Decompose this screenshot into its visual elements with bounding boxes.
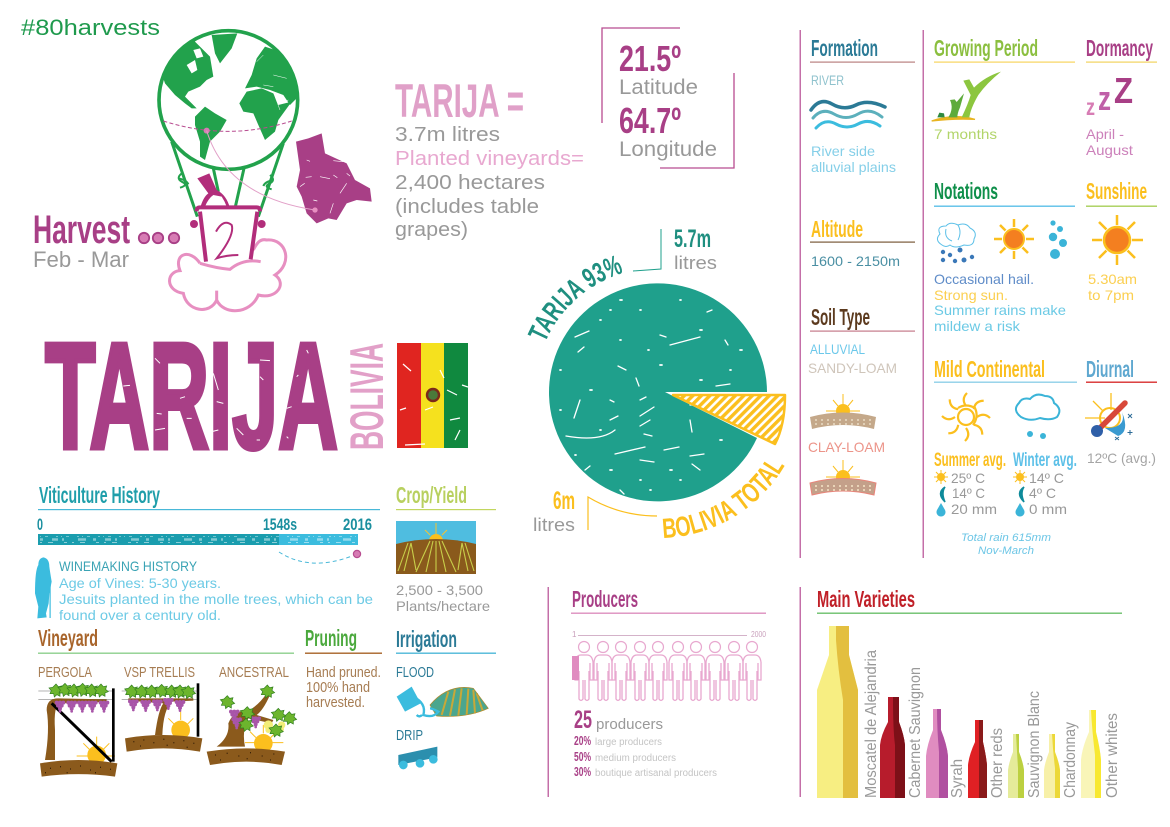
- bottle: Sauvignon Blanc: [1008, 691, 1043, 798]
- bottle: Moscatel de Alejandria: Moscatel de Alejandria: [863, 650, 880, 798]
- panel: soil type: SANDY-LOAM: [808, 360, 897, 376]
- icon: zzz: [1086, 70, 1133, 120]
- panel: crop yield: Crop/Yield: [396, 482, 467, 508]
- panel: notations: Summer rains make: [934, 302, 1066, 318]
- panel: notations: Notations: [934, 178, 998, 204]
- producers count: [574, 706, 663, 734]
- total rain note: Total rain 615mm: [961, 532, 1051, 544]
- panel: pruning: Pruning: [305, 625, 357, 651]
- summer average: Summer avg.: [934, 450, 1006, 471]
- continents: [163, 33, 298, 160]
- coordinates box: Latitude: [619, 76, 698, 99]
- icon: flood irrigation: [397, 687, 488, 716]
- bottle: Chardonnay: Chardonnay: [1062, 722, 1079, 798]
- callout: 5.7m litres: litres: [674, 253, 717, 273]
- panel: diurnal: Diurnal: [1086, 356, 1134, 382]
- icon: hail cloud: [937, 223, 975, 263]
- winter average: [1013, 450, 1077, 517]
- icon: rain drops: [1049, 220, 1067, 259]
- icon: zzz: z: [1086, 94, 1095, 120]
- producers breakdown: 30%: [574, 764, 591, 779]
- bottle: Moscatel de Alejandria: [817, 626, 880, 798]
- label: Bolivia total: [663, 465, 785, 538]
- producers count: 25: [574, 706, 592, 734]
- icon: zzz: Z: [1114, 70, 1133, 111]
- bottle: Other reds: [968, 720, 1006, 798]
- panel: formation: [810, 35, 915, 175]
- panel: notations: Strong sun.: [934, 287, 1008, 303]
- producers breakdown: 50%: [574, 749, 591, 764]
- icon: elderly person: [35, 557, 52, 618]
- title: TARIJA: TARIJA: [45, 311, 338, 480]
- panel: notations: Occasional hail.: [934, 271, 1034, 287]
- production text block: 3.7m litres: [395, 124, 500, 146]
- pie chart: Tarija share of Bolivia: [528, 225, 786, 538]
- coordinates box: 64.7º: [619, 100, 681, 141]
- icon: VSP trellis vine: [122, 683, 202, 752]
- icon: pergola vine: [38, 683, 117, 777]
- producers breakdown: 20%: [574, 733, 591, 748]
- total rain note: [961, 532, 1051, 557]
- panel: soil type: [808, 304, 915, 495]
- panel: main varieties: [817, 586, 1122, 798]
- hashtag: #80harvests: [21, 15, 160, 40]
- production text block: TARIJA =: [395, 74, 524, 127]
- harvest dates: Feb - Mar: [33, 247, 129, 272]
- panel: pruning: [305, 625, 382, 711]
- panel: growing period: 7 months: [934, 126, 997, 142]
- panel: vineyard: VSP TRELLIS: [124, 664, 195, 681]
- icon: globe hot air balloon: [159, 31, 372, 311]
- producers breakdown: large producers: [595, 737, 662, 748]
- winemaking text: WINEMAKING HISTORY: [59, 558, 198, 574]
- panel: diurnal: [1085, 356, 1157, 466]
- winter average: Winter avg.: [1013, 450, 1077, 471]
- panel: vineyard: ANCESTRAL: [219, 664, 289, 681]
- callout: 6m litres: litres: [533, 515, 575, 535]
- panel: notations: mildew a risk: [934, 318, 1021, 334]
- panel: viticulture history: [35, 482, 380, 623]
- panel: producers: 2000: [751, 630, 766, 639]
- winter average: 4º C: [1029, 485, 1056, 501]
- icon: sun: [1092, 215, 1143, 265]
- total rain note: Nov-March: [978, 545, 1034, 557]
- winter average: 14º C: [1029, 470, 1064, 486]
- globe outline: [159, 31, 298, 169]
- bottle in bucket: [197, 173, 230, 208]
- coordinates box: [602, 28, 734, 168]
- panel: pruning: 100% hand: [306, 679, 370, 696]
- production text block: [395, 74, 584, 241]
- heading: Harvest: Harvest: [33, 208, 130, 252]
- callout: 6m litres: 6m: [553, 487, 575, 515]
- panel: crop yield: [396, 482, 496, 614]
- bucket: [200, 212, 257, 262]
- title: TARIJA: [45, 311, 338, 480]
- bottle: Sauvignon Blanc: Sauvignon Blanc: [1026, 691, 1043, 798]
- panel: growing period: [932, 35, 1075, 142]
- panel: viticulture history: 2016: [343, 515, 372, 534]
- production text block: grapes): [395, 219, 468, 241]
- summer average: [934, 450, 1006, 517]
- icon: three dots: [139, 233, 179, 243]
- icon: clay-loam soil: [810, 460, 876, 495]
- bottle: Syrah: Syrah: [949, 759, 966, 798]
- callout: 6m litres: [533, 487, 657, 535]
- panel: formation: RIVER: [811, 72, 844, 88]
- bottle: Other whites: Other whites: [1104, 713, 1121, 798]
- cloud: [170, 240, 286, 311]
- panel: viticulture history: 0: [37, 515, 43, 534]
- winemaking text: Age of Vines: 5-30 years.: [59, 575, 221, 591]
- icon: ancestral vine: [207, 685, 297, 765]
- panel: soil type: ALLUVIAL: [810, 341, 865, 357]
- production text block: Planted vineyards=: [395, 148, 584, 170]
- icon: globe hot air balloon: 2: [200, 256, 201, 257]
- panel: altitude: Altitude: [811, 216, 863, 242]
- pie chart: Tarija share of Bolivia: BOLIVIA TOTAL: [662, 462, 785, 538]
- panel: dormancy: August: [1086, 142, 1133, 158]
- icon: river waves: [811, 102, 885, 128]
- panel: sunshine: [1086, 178, 1157, 303]
- panel: sunshine: 5.30am: [1088, 271, 1137, 287]
- balloon ropes: [172, 142, 283, 217]
- icon: Bolivian flag: [397, 343, 468, 448]
- vine illustrations: [38, 683, 297, 777]
- panel: soil type: Soil Type: [811, 304, 870, 330]
- producers breakdown: medium producers: [595, 753, 676, 764]
- bottle: Cabernet Sauvignon: Cabernet Sauvignon: [907, 667, 924, 798]
- panel: vineyard: PERGOLA: [38, 664, 92, 681]
- subtitle: BOLIVIA: BOLIVIA: [340, 343, 393, 450]
- winter average: 0 mm: [1029, 501, 1067, 517]
- panel: mild continental: [934, 356, 1077, 557]
- bottle: Other reds: Other reds: [989, 728, 1006, 798]
- panel: producers: Producers: [572, 586, 638, 612]
- pie chart: Tarija share of Bolivia: TARIJA 93%: [528, 256, 622, 339]
- panel: irrigation: [396, 626, 496, 769]
- icon: zzz: z: [1098, 80, 1111, 118]
- producers breakdown: boutique artisanal producers: [595, 768, 717, 779]
- icon: sprouting vine: [932, 72, 1001, 121]
- winemaking text: [59, 558, 373, 623]
- icon: strong sun: [994, 219, 1034, 259]
- icon: drip irrigation: [398, 747, 438, 769]
- panel: sunshine: to 7pm: [1088, 287, 1134, 303]
- bottle: Other whites: [1081, 710, 1121, 798]
- map: Bolivia: [296, 133, 372, 223]
- panel: crop yield: 2,500 - 3,500: [396, 582, 483, 598]
- panel: pruning: harvested.: [306, 694, 365, 711]
- panel: viticulture history: 1548s: [263, 515, 297, 534]
- bottle: Syrah: [926, 709, 966, 798]
- panel: diurnal: 12ºC (avg.): [1087, 450, 1156, 466]
- panel: altitude: [810, 216, 915, 269]
- people pictogram: [572, 642, 761, 700]
- panel: mild continental: Mild Continental: [934, 356, 1045, 382]
- callout: 5.7m litres: 5.7m: [674, 225, 711, 253]
- slice: rest of Bolivia: [673, 395, 785, 444]
- panel: growing period: Growing Period: [934, 35, 1038, 61]
- icon: thermometer: [1085, 393, 1132, 440]
- icon: winter cloud: [1016, 395, 1059, 439]
- label: Tarija 93%: [545, 273, 623, 343]
- panel: viticulture history: Viticulture History: [39, 482, 160, 508]
- icon: summer sun: [942, 393, 990, 441]
- panel: formation: alluvial plains: [811, 159, 896, 175]
- panel: irrigation: Irrigation: [396, 626, 457, 652]
- producers count: producers: [596, 716, 663, 733]
- callout: 5.7m litres: [633, 225, 717, 273]
- panel: pruning: Hand pruned.: [306, 664, 381, 681]
- panel: dormancy: April -: [1086, 126, 1124, 142]
- summer average: 20 mm: [951, 501, 997, 517]
- winemaking text: found over a century old.: [59, 607, 221, 623]
- panel: soil type: CLAY-LOAM: [808, 439, 885, 455]
- summer average: 14º C: [952, 485, 985, 501]
- winemaking text: Jesuits planted in the molle trees, which can be: [59, 591, 373, 607]
- panel: dormancy: [1086, 35, 1157, 158]
- bottle: Cabernet Sauvignon: [880, 667, 924, 798]
- panel: formation: Formation: [811, 35, 878, 61]
- panel: main varieties: Main Varieties: [817, 586, 915, 612]
- panel: formation: River side: [811, 143, 875, 159]
- producers breakdown: [574, 733, 717, 779]
- panel: producers: 1: [572, 630, 577, 639]
- panel: vineyard: Vineyard: [38, 625, 98, 651]
- panel: producers: [571, 586, 766, 779]
- panel: vineyard: [38, 625, 297, 777]
- production text block: 2,400 hectares: [395, 172, 545, 194]
- icon: sandy-loam soil: [810, 394, 876, 429]
- panel: altitude: 1600 - 2150m: [811, 254, 900, 269]
- coordinates box: 21.5º: [619, 38, 681, 79]
- panel: irrigation: FLOOD: [396, 664, 434, 681]
- bottle: Chardonnay: [1044, 722, 1079, 798]
- summer average: 25º C: [951, 470, 985, 486]
- panel: notations: [934, 178, 1075, 334]
- panel: crop yield: Plants/hectare: [396, 598, 490, 614]
- coordinates box: Longitude: [619, 138, 717, 161]
- timeline bar: [38, 534, 358, 545]
- panel: irrigation: DRIP: [396, 727, 423, 744]
- production text block: (includes table: [395, 196, 539, 218]
- icon: vineyard rows: [396, 521, 476, 574]
- slice: Tarija 93%: [549, 283, 767, 501]
